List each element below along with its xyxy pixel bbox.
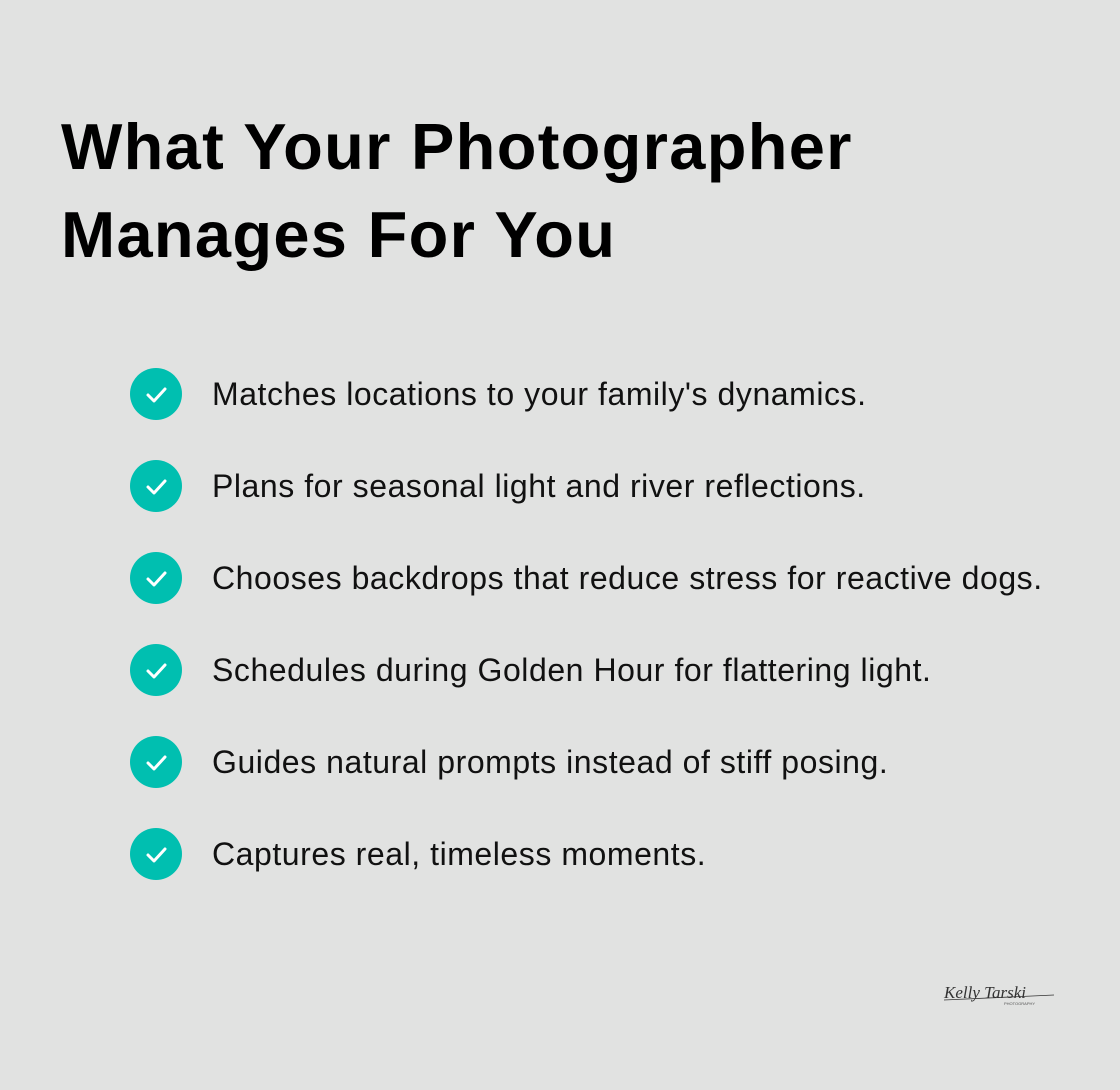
list item 4: Schedules during Golden Hour for flattering light. bbox=[212, 652, 931, 688]
list item 4 bbox=[130, 644, 931, 696]
list item 1: Matches locations to your family's dynamics. bbox=[212, 376, 867, 412]
list item 3: Chooses backdrops that reduce stress for reactive dogs. bbox=[212, 560, 1043, 596]
title bbox=[61, 110, 853, 271]
list item 6: Captures real, timeless moments. bbox=[212, 836, 706, 872]
list item 2 bbox=[130, 460, 866, 512]
logo signature bbox=[943, 983, 1054, 1006]
list item 6 bbox=[130, 828, 706, 880]
icon: check bbox=[130, 828, 182, 880]
list item 2: Plans for seasonal light and river reflections. bbox=[212, 468, 866, 504]
logo signature: Kelly Tarski bbox=[943, 983, 1026, 1002]
title: Manages For You bbox=[61, 198, 616, 271]
icon: check bbox=[130, 644, 182, 696]
icon: check bbox=[130, 552, 182, 604]
list item 3 bbox=[130, 552, 1043, 604]
list item 5: Guides natural prompts instead of stiff posing. bbox=[212, 744, 888, 780]
title: What Your Photographer bbox=[61, 110, 853, 183]
list item 5 bbox=[130, 736, 888, 788]
icon: check bbox=[130, 368, 182, 420]
icon: check bbox=[130, 736, 182, 788]
list item 1 bbox=[130, 368, 867, 420]
icon: check bbox=[130, 460, 182, 512]
logo signature: PHOTOGRAPHY bbox=[1004, 1001, 1035, 1006]
